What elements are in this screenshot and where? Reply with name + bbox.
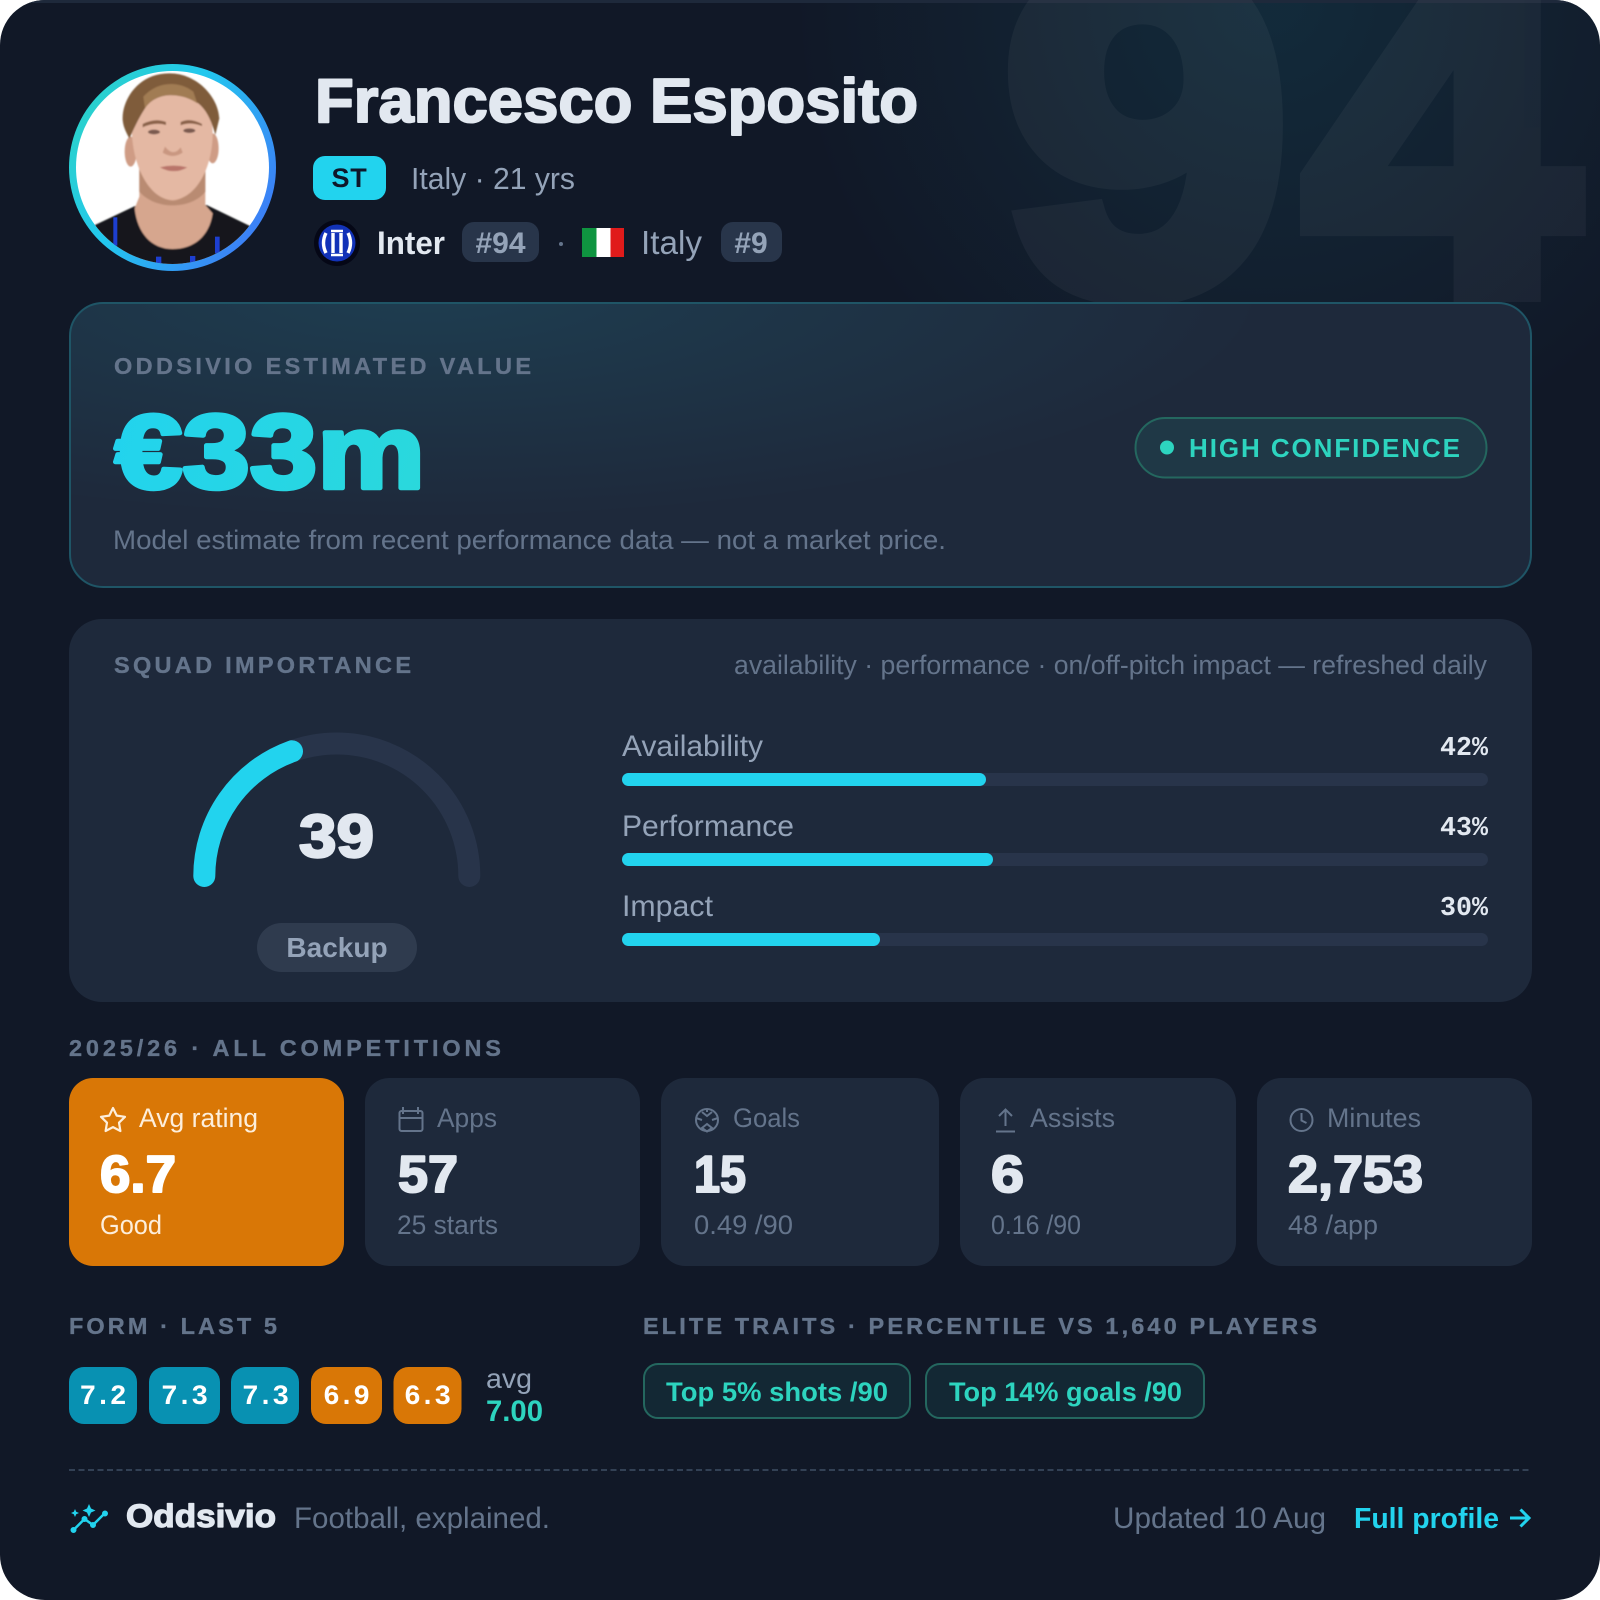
nationality and age: Italy · 21 yrs — [411, 161, 575, 196]
national shirt number — [721, 222, 782, 262]
role pill — [257, 923, 417, 972]
bar: performance: 43% — [1440, 814, 1489, 844]
stat card: minutes: 48 /app — [1288, 1210, 1378, 1240]
chip: 6.9: 6.9 — [323, 1382, 370, 1413]
form chips — [69, 1367, 462, 1424]
form heading: FORM · LAST 5 — [69, 1313, 277, 1339]
stat card: goals — [661, 1078, 939, 1266]
chip: 6.9 — [311, 1367, 382, 1424]
separator dot — [559, 242, 563, 246]
stat card: minutes: 2,753 — [1288, 1146, 1423, 1204]
bar: availability: Availability — [622, 730, 763, 763]
stat card: apps: 57 — [398, 1146, 458, 1204]
profile link: Full profile — [1354, 1503, 1499, 1535]
position badge: ST — [331, 163, 368, 193]
club and country row — [314, 220, 782, 266]
icon: Oddsivio logo — [71, 1504, 108, 1532]
bar: performance — [622, 810, 1489, 866]
panel heading: SQUAD IMPORTANCE — [114, 652, 411, 678]
chip: 7.3 — [231, 1367, 299, 1424]
role pill: Backup — [286, 932, 388, 963]
stat card: apps — [365, 1078, 640, 1266]
confidence pill — [1136, 418, 1486, 478]
trait pill: goals — [926, 1364, 1204, 1418]
stat card: assists: 0.16 /90 — [991, 1210, 1081, 1240]
trait pill: shots — [644, 1364, 910, 1418]
form average: 7.00 — [486, 1395, 543, 1428]
icon: star — [101, 1108, 125, 1131]
season heading: 2025/26 · ALL COMPETITIONS — [69, 1035, 501, 1061]
stat card: apps: Apps — [437, 1103, 497, 1133]
footer — [71, 1498, 1529, 1535]
stat card: minutes — [1257, 1078, 1532, 1266]
bar: availability — [622, 730, 1489, 786]
chip: 7.2 — [69, 1367, 137, 1424]
stat card: goals: 15 — [694, 1146, 746, 1204]
form average: avg — [486, 1363, 532, 1394]
stat card: average rating: 6.7 — [100, 1146, 176, 1204]
chip: 6.3: 6.3 — [404, 1382, 451, 1413]
position badge — [313, 156, 386, 200]
icon: Italian flag — [582, 228, 624, 257]
chip: 7.3: 7.3 — [161, 1382, 208, 1413]
avatar: player portrait — [69, 64, 276, 271]
panel: estimated value — [70, 303, 1531, 587]
chip: 6.3 — [394, 1367, 462, 1424]
icon: Inter crest — [314, 220, 360, 266]
panel description: availability · performance · on/off-pitch impact — refreshed daily — [734, 650, 1487, 680]
bar: impact — [622, 890, 1489, 946]
stat card: assists: Assists — [1030, 1103, 1115, 1133]
updated date: Updated 10 Aug — [1113, 1502, 1326, 1535]
icon: up arrow — [996, 1110, 1015, 1132]
gauge chart: 39: 39 — [299, 803, 374, 870]
confidence pill: HIGH CONFIDENCE — [1189, 433, 1460, 463]
national shirt number: #9 — [734, 227, 768, 260]
value amount: €33m — [115, 394, 425, 511]
stat card: assists: 6 — [991, 1146, 1024, 1204]
stat card: average rating: Avg rating — [139, 1103, 258, 1133]
brand name: Oddsivio — [126, 1498, 276, 1534]
panel: squad importance — [69, 619, 1532, 1002]
club shirt number — [462, 222, 539, 262]
bar: availability: 42% — [1440, 734, 1489, 764]
trait pill: shots: Top 5% shots /90 — [666, 1377, 888, 1407]
gauge chart: 39 — [204, 744, 469, 876]
icon: calendar — [399, 1107, 423, 1131]
icon: arrow — [1510, 1510, 1529, 1526]
stat card: apps: 25 starts — [397, 1210, 498, 1240]
icon: clock — [1290, 1109, 1312, 1131]
bar: impact: 30% — [1440, 894, 1489, 924]
club shirt number: #94 — [475, 227, 526, 260]
stat card: goals: Goals — [733, 1103, 800, 1133]
stat card: average rating: Good — [100, 1210, 162, 1240]
club name: Inter — [377, 225, 445, 261]
trait pill: goals: Top 14% goals /90 — [949, 1377, 1182, 1407]
chip: 7.3: 7.3 — [242, 1382, 289, 1413]
value label: ODDSIVIO ESTIMATED VALUE — [114, 353, 531, 379]
tagline: Football, explained. — [294, 1502, 550, 1535]
country name: Italy — [641, 224, 702, 261]
chip: 7.2: 7.2 — [80, 1382, 126, 1413]
value note: Model estimate from recent performance data — not a market price. — [113, 525, 946, 555]
player header — [69, 64, 918, 271]
stat card: assists — [960, 1078, 1236, 1266]
bar: performance: Performance — [622, 810, 794, 843]
stat card: average rating — [69, 1078, 344, 1266]
chip: 7.3 — [149, 1367, 220, 1424]
watermark: shirt number 94 — [1008, 0, 1586, 302]
stat card: goals: 0.49 /90 — [694, 1210, 793, 1240]
stat card: minutes: Minutes — [1327, 1103, 1421, 1133]
player name: Francesco Esposito — [315, 67, 918, 136]
form average — [486, 1363, 543, 1428]
bar: impact: Impact — [622, 890, 714, 923]
traits heading: ELITE TRAITS · PERCENTILE VS 1,640 PLAYERS — [643, 1313, 1317, 1339]
icon: ball — [696, 1109, 718, 1132]
